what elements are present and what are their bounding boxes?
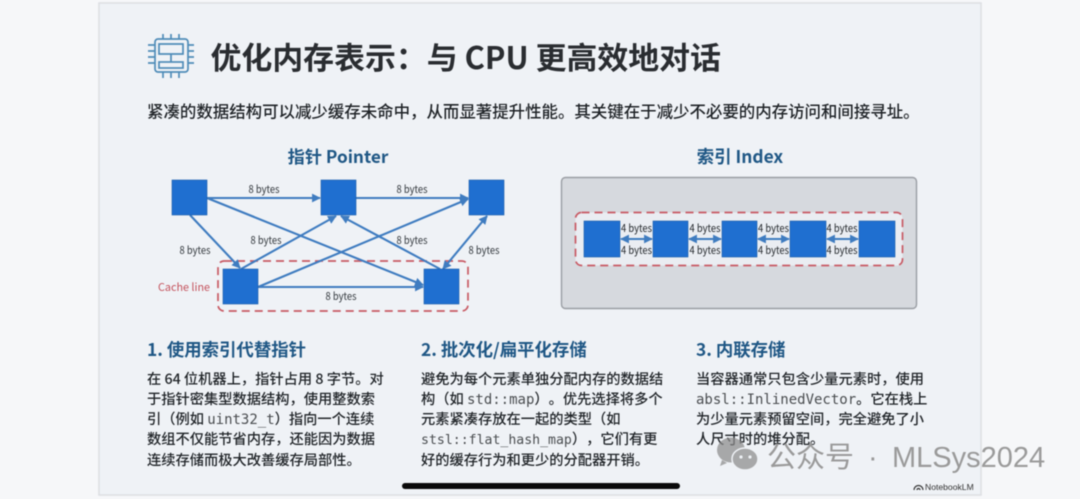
body bbox=[421, 368, 663, 470]
watermark text: MLSys2024 bbox=[892, 442, 1045, 474]
index arrows bbox=[621, 238, 858, 240]
body: 构（如 std::map）。优先选择将多个 bbox=[421, 388, 663, 409]
body: 人尺寸时的堆分配。 bbox=[696, 428, 824, 449]
heading: 3. 内联存储 bbox=[696, 337, 785, 362]
heading: index: 索引 Index bbox=[697, 144, 783, 169]
icon: WeChat watermark bbox=[717, 438, 758, 470]
index labels: 4 bytes bbox=[690, 242, 720, 258]
pointer labels: 8 bytes bbox=[326, 288, 356, 304]
index labels: 4 bytes bbox=[826, 220, 858, 236]
diagram: index array bbox=[576, 212, 902, 266]
watermark text: · bbox=[868, 442, 878, 474]
pointer labels: 8 bytes bbox=[180, 242, 210, 258]
index labels: 4 bytes bbox=[758, 220, 789, 236]
body: 为少量元素预留空间，完全避免了小 bbox=[696, 408, 924, 429]
pointer arrows bbox=[190, 198, 487, 287]
column 2 bbox=[421, 337, 663, 470]
index labels: 4 bytes bbox=[621, 242, 652, 258]
index labels: 4 bytes bbox=[758, 242, 789, 258]
index labels: 4 bytes bbox=[690, 220, 720, 236]
column 1 bbox=[147, 337, 384, 470]
body: 在 64 位机器上，指针占用 8 字节。对 bbox=[147, 368, 384, 389]
diagram: pointer graph bbox=[158, 180, 504, 311]
icon: CPU chip bbox=[148, 34, 194, 78]
NotebookLM logo: NotebookLM bbox=[925, 482, 974, 492]
title: 优化内存表示：与 CPU 更高效地对话 bbox=[210, 33, 721, 78]
pointer labels: 8 bytes bbox=[396, 181, 428, 197]
cache line label: Cache line bbox=[158, 279, 210, 295]
pointer labels bbox=[180, 181, 500, 304]
panel: index memory block bbox=[562, 178, 916, 308]
body: stsl::flat_hash_map），它们有更 bbox=[421, 428, 657, 449]
index labels: 4 bytes bbox=[826, 242, 858, 258]
body: 数组不仅能节省内存，还能因为数据 bbox=[147, 428, 375, 449]
home indicator bar bbox=[402, 483, 680, 489]
pointer labels: 8 bytes bbox=[396, 232, 428, 248]
cache line dashed box bbox=[218, 261, 468, 311]
body: 当容器通常只包含少量元素时，使用 bbox=[696, 368, 924, 389]
cache line dashed box bbox=[576, 212, 902, 266]
body: 于指针密集型数据结构，使用整数索 bbox=[147, 388, 375, 409]
subtitle: 紧凑的数据结构可以减少缓存未命中，从而显著提升性能。其关键在于减少不必要的内存访问和间接寻址。 bbox=[147, 98, 920, 122]
watermark text: 公众号 bbox=[767, 442, 854, 474]
heading: pointer: 指针 Pointer bbox=[288, 143, 389, 168]
pointer nodes bbox=[172, 180, 504, 304]
column 3 bbox=[696, 337, 927, 449]
heading: 1. 使用索引代替指针 bbox=[147, 337, 306, 362]
body: 引（例如 uint32_t）指向一个连续 bbox=[147, 408, 374, 429]
index labels: 4 bytes bbox=[621, 220, 652, 236]
pointer labels: 8 bytes bbox=[250, 232, 282, 248]
body: absl::InlinedVector。它在栈上 bbox=[696, 388, 927, 409]
body: 连续存储而极大改善缓存局部性。 bbox=[147, 449, 361, 470]
body bbox=[696, 368, 927, 449]
index labels bbox=[621, 220, 858, 258]
index nodes bbox=[584, 221, 895, 257]
body bbox=[147, 368, 384, 470]
body: 元素紧凑存放在一起的类型（如 bbox=[421, 408, 621, 429]
pointer labels: 8 bytes bbox=[468, 242, 500, 258]
body: 避免为每个元素单独分配内存的数据结 bbox=[421, 368, 663, 389]
heading: 2. 批次化/扁平化存储 bbox=[421, 337, 587, 362]
body: 好的缓存行为和更少的分配器开销。 bbox=[421, 449, 649, 470]
pointer labels: 8 bytes bbox=[248, 181, 280, 197]
